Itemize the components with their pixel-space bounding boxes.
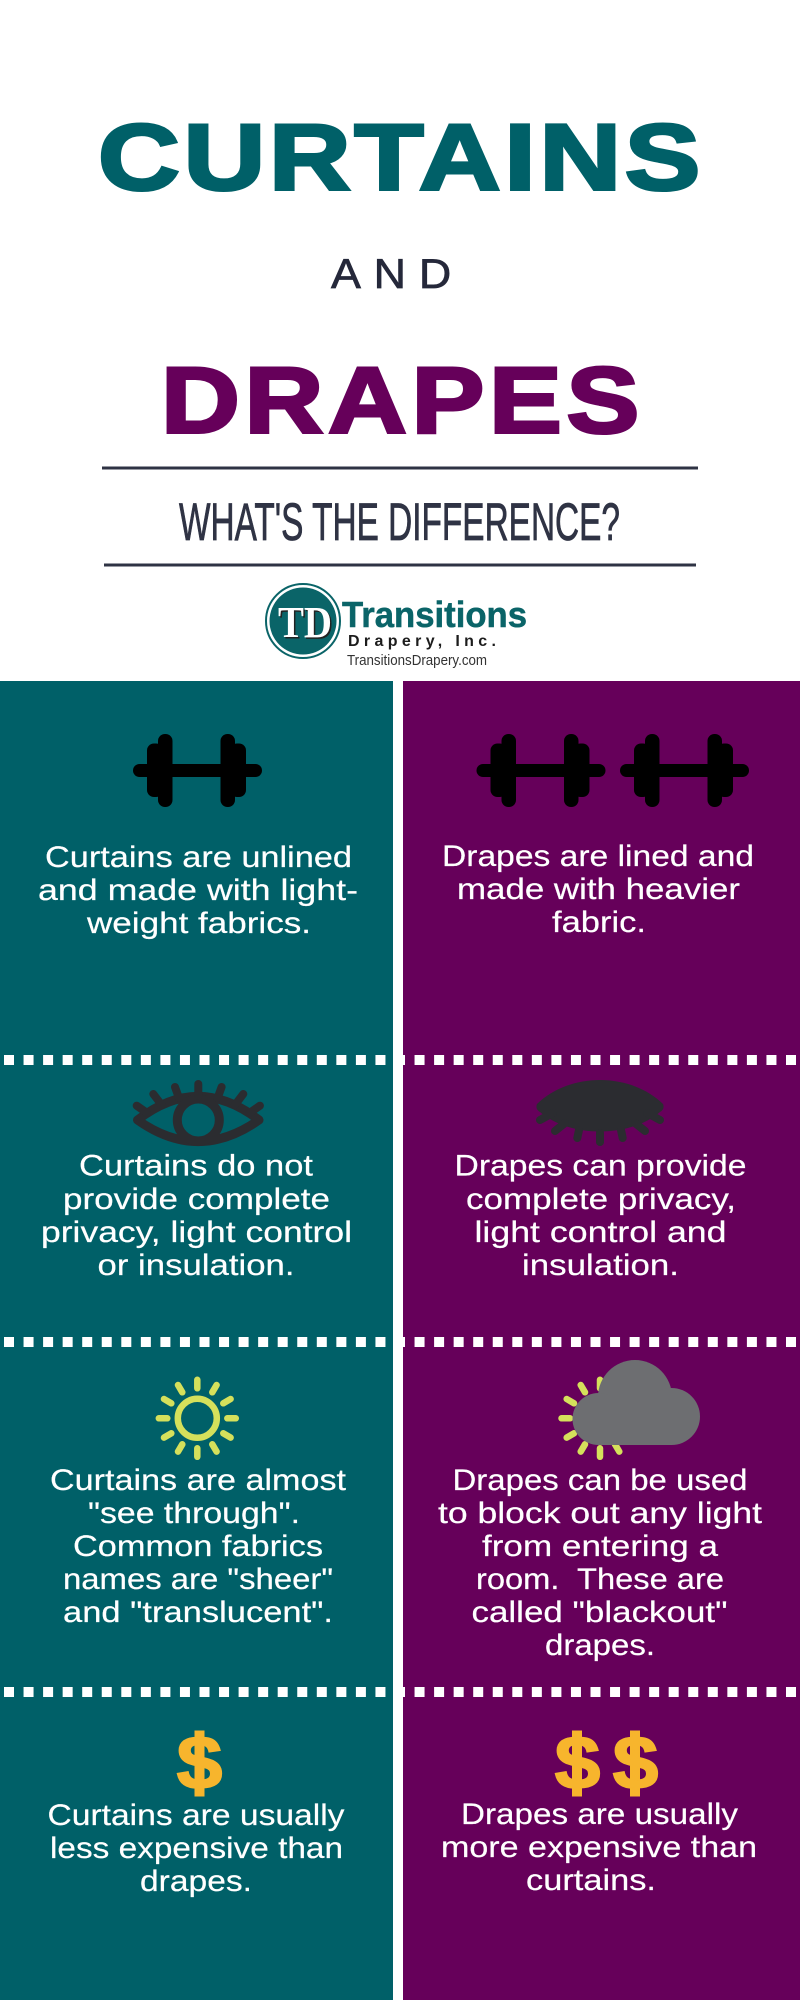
text: drapes weight: made with heavier <box>457 873 740 906</box>
row: drapes light <box>438 1360 762 1662</box>
icon: closed eye <box>536 1080 664 1142</box>
text: drapes weight: Drapes are lined and <box>442 840 754 873</box>
logo: Transitions Drapery <box>266 584 527 669</box>
text: curtains light: "see through". <box>88 1497 300 1530</box>
text: drapes cost: curtains. <box>526 1864 656 1897</box>
text: drapes cost: more expensive than <box>441 1831 757 1864</box>
logo wordmark: Transitions <box>342 594 527 635</box>
text: drapes privacy: Drapes can provide <box>454 1150 746 1182</box>
icon: dollar sign: $ <box>176 1721 222 1806</box>
logo url: TransitionsDrapery.com <box>347 653 487 669</box>
text: drapes light: called "blackout" <box>472 1596 728 1629</box>
row: curtains cost <box>48 1721 345 1898</box>
row: curtains weight <box>38 734 358 940</box>
text: drapes cost: Drapes are usually <box>461 1798 738 1831</box>
icon: sun behind cloud <box>562 1360 700 1457</box>
title: and: AND <box>331 250 464 297</box>
text: curtains cost: Curtains are usually <box>48 1799 345 1832</box>
icon: cloud <box>572 1360 700 1445</box>
icon: open eye <box>137 1084 260 1142</box>
text: drapes privacy: insulation. <box>522 1249 679 1282</box>
text: curtains weight: weight fabrics. <box>86 907 311 940</box>
text: curtains privacy: provide complete <box>63 1183 330 1216</box>
text: drapes weight: fabric. <box>552 906 646 939</box>
row: curtains privacy <box>41 1084 352 1282</box>
text: drapes light: Drapes can be used <box>452 1464 748 1497</box>
text: drapes light: from entering a <box>482 1530 719 1563</box>
row: drapes weight <box>442 734 754 939</box>
row: drapes privacy <box>454 1080 746 1282</box>
panel: curtains column <box>0 681 393 2000</box>
text: curtains light: Common fabrics <box>73 1530 323 1563</box>
text: curtains light: and "translucent". <box>63 1596 333 1629</box>
icon: double barbell <box>476 734 749 807</box>
text: drapes light: drapes. <box>545 1629 655 1662</box>
text: curtains privacy: privacy, light control <box>41 1216 352 1249</box>
title: curtains: CURTAINS <box>98 104 704 210</box>
text: drapes light: to block out any light <box>438 1497 762 1530</box>
panel: drapes column <box>395 681 800 2000</box>
row: drapes cost <box>441 1721 757 1897</box>
logo emblem: TD <box>278 598 332 647</box>
text: curtains privacy: Curtains do not <box>79 1150 313 1182</box>
title: drapes: DRAPES <box>161 348 644 452</box>
icon: two dollar signs <box>554 1721 658 1806</box>
logo emblem: TD <box>280 600 334 648</box>
icon: single barbell <box>133 734 262 807</box>
text: drapes privacy: complete privacy, <box>466 1183 736 1216</box>
icon: two dollar signs: $ <box>612 1721 658 1806</box>
text: curtains privacy: or insulation. <box>98 1249 294 1282</box>
text: drapes light: room. These are <box>476 1563 724 1596</box>
header section <box>98 104 704 669</box>
text: curtains weight: Curtains are unlined <box>45 841 352 874</box>
logo tagline: Drapery, Inc. <box>348 633 496 650</box>
logo emblem <box>266 584 340 658</box>
text: curtains cost: less expensive than <box>50 1832 343 1865</box>
text: curtains weight: and made with light- <box>38 874 358 907</box>
text: drapes privacy: light control and <box>474 1216 726 1249</box>
icon: sun <box>159 1380 236 1457</box>
text: curtains cost: drapes. <box>140 1865 252 1898</box>
row: curtains light <box>50 1380 346 1629</box>
icon: two dollar signs: $ <box>554 1721 600 1806</box>
text: curtains light: names are "sheer" <box>63 1563 333 1596</box>
text: curtains light: Curtains are almost <box>50 1464 346 1497</box>
